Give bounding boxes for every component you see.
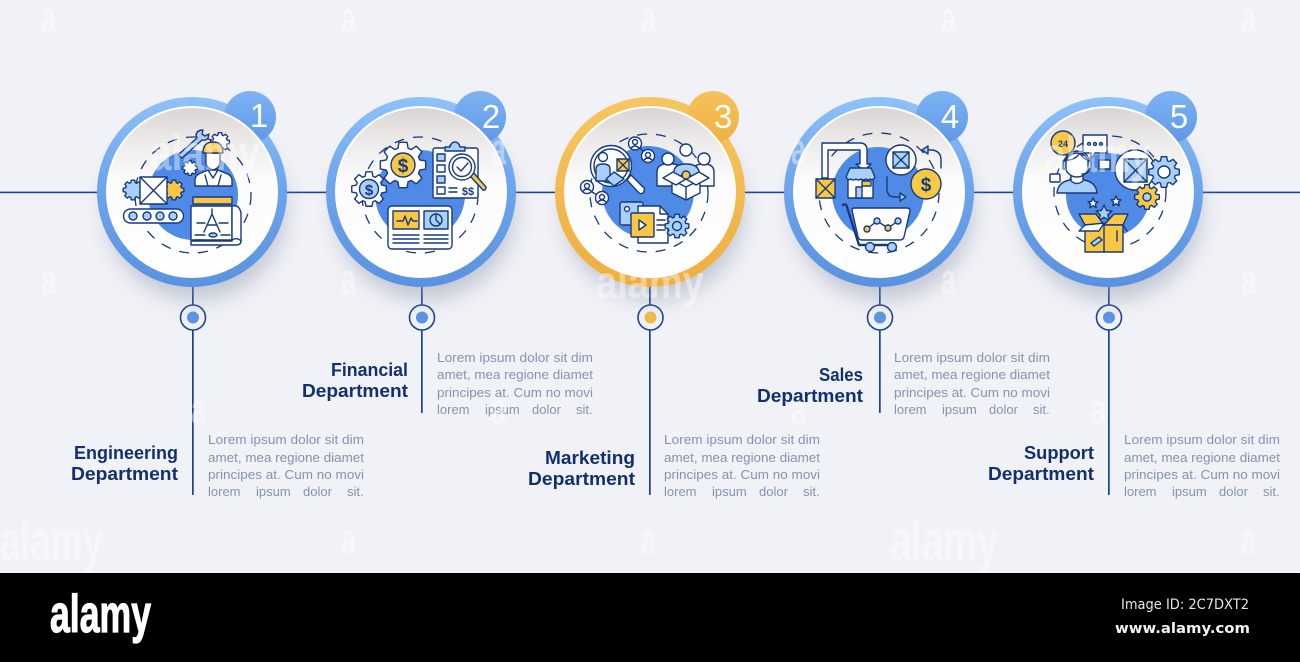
heading: Sales Department (757, 364, 863, 406)
body text 4: sit. (1033, 402, 1050, 417)
heading: Financial Department: Financial (331, 359, 408, 380)
heading: Sales Department: Department (757, 385, 863, 406)
icon: support (1050, 131, 1179, 252)
body text 4 (894, 350, 1050, 417)
icon: engineering (123, 130, 241, 245)
timeline: horizontal connector (0, 192, 1300, 193)
watermarks: a (1241, 515, 1256, 564)
shadow (335, 120, 515, 300)
heading: Sales Department: Sales (819, 364, 863, 385)
heading: Support Department: Support (1024, 442, 1094, 463)
face 4 (794, 107, 964, 277)
blue disc 3 (602, 146, 694, 238)
watermarks: alamy (890, 509, 998, 573)
body text 2: sit. (576, 402, 593, 417)
icon: finance (352, 142, 486, 249)
body text 1: dolor (303, 484, 333, 499)
body text 1: sit. (347, 484, 364, 499)
body text 5: lorem (1124, 484, 1157, 499)
icon: support: 24 (1058, 139, 1068, 149)
body text 2: Lorem ipsum dolor sit dim (437, 350, 593, 365)
shadow (564, 120, 744, 300)
body text 2: amet, mea regione diamet (437, 367, 593, 382)
face 5 (1023, 107, 1193, 277)
body text 3: dolor (759, 484, 789, 499)
body text 5: dolor (1219, 484, 1249, 499)
step 2: financial department (302, 91, 593, 417)
heading: Financial Department: Department (302, 380, 408, 401)
number 4: 4 (941, 98, 959, 135)
body text 4: amet, mea regione diamet (894, 367, 1050, 382)
number badge 2 (454, 91, 506, 143)
footer logo: alamy (50, 585, 151, 644)
watermarks: a (191, 385, 206, 434)
watermarks: a (341, 515, 356, 564)
icon: sales: $ (921, 175, 932, 196)
connector stem with node 1 (180, 285, 206, 495)
watermarks: a (1091, 385, 1106, 434)
body text 3: sit. (803, 484, 820, 499)
number 3: 3 (714, 98, 732, 135)
step 1: engineering department (71, 91, 364, 499)
ring 2 (326, 97, 516, 287)
body text 1: amet, mea regione diamet (208, 450, 364, 465)
icon: finance: $ (365, 182, 374, 199)
dashed ring 4 (819, 133, 939, 253)
body text 3: Lorem ipsum dolor sit dim (664, 432, 820, 447)
number badge 3 (687, 91, 739, 143)
step 4: sales department (757, 91, 1050, 417)
number 2: 2 (482, 98, 500, 135)
body text 2: dolor (532, 402, 562, 417)
body text 5 (1124, 432, 1280, 499)
ring 4 (784, 97, 974, 287)
blue disc 1 (148, 150, 238, 240)
ring 1 (97, 97, 287, 287)
watermarks: alamy (1045, 127, 1151, 183)
watermarks: a (491, 385, 506, 434)
watermarks: a (491, 125, 506, 174)
watermarks: a (791, 385, 806, 434)
heading: Engineering Department: Engineering (74, 442, 178, 463)
watermarks: a (641, 515, 656, 564)
body text 1: ipsum (256, 484, 291, 499)
body text 5: principes at. Cum no movi (1124, 467, 1280, 482)
blue disc 2 (375, 150, 465, 240)
heading: Engineering Department: Department (71, 463, 178, 484)
image id: Image ID: 2C7DXT2 (1121, 597, 1249, 613)
body text 4: dolor (989, 402, 1019, 417)
icon: finance: $ (398, 156, 409, 177)
body text 2: lorem (437, 402, 470, 417)
body text 1: lorem (208, 484, 241, 499)
body text 5: amet, mea regione diamet (1124, 450, 1280, 465)
watermarks: alamy (596, 256, 704, 308)
icon: sales (816, 143, 941, 252)
step 3: marketing department (528, 91, 820, 499)
heading: Financial Department (302, 359, 408, 401)
website: www.alamy.com (1115, 621, 1250, 637)
shadow (106, 120, 286, 300)
body text 3: lorem (664, 484, 697, 499)
dashed ring 2 (362, 137, 478, 253)
body text 4: lorem (894, 402, 927, 417)
blue disc 4 (832, 147, 924, 239)
body text 3 (664, 432, 820, 499)
body text 5: ipsum (1172, 484, 1207, 499)
ring 3 (555, 97, 745, 287)
icon: finance: $$ (462, 186, 474, 198)
body text 3: ipsum (712, 484, 747, 499)
watermarks: a (41, 255, 56, 304)
heading: Support Department: Department (988, 463, 1094, 484)
body text 2: principes at. Cum no movi (437, 385, 593, 400)
heading: Support Department (988, 442, 1094, 484)
connector stem with node 3 (638, 285, 663, 495)
body text 5: Lorem ipsum dolor sit dim (1124, 432, 1280, 447)
ring 5 (1013, 97, 1203, 287)
body text 4: principes at. Cum no movi (894, 385, 1050, 400)
number 5: 5 (1170, 98, 1188, 135)
body text 4: Lorem ipsum dolor sit dim (894, 350, 1050, 365)
face 2 (336, 107, 506, 277)
connector stem with node 2 (410, 285, 434, 413)
shadow (793, 120, 973, 300)
shadow (1022, 120, 1202, 300)
heading: Marketing Department (528, 447, 635, 489)
face 3 (565, 107, 735, 277)
dashed ring 3 (590, 134, 708, 252)
connector stem with node 5 (1096, 285, 1122, 495)
body text 1: Lorem ipsum dolor sit dim (208, 432, 364, 447)
number 1: 1 (250, 97, 268, 134)
body text 5: sit. (1263, 484, 1280, 499)
heading: Marketing Department: Marketing (545, 447, 635, 468)
watermarks: alamy (0, 509, 103, 573)
watermarks: a (1241, 255, 1256, 304)
face 1 (107, 107, 277, 277)
body text 4: ipsum (942, 402, 977, 417)
dashed ring 1 (135, 137, 251, 253)
body text 3: principes at. Cum no movi (664, 467, 820, 482)
body text 1: principes at. Cum no movi (208, 467, 364, 482)
dashed ring 5 (1054, 136, 1166, 248)
number badge 5 (1145, 91, 1197, 143)
watermarks: a (791, 125, 806, 174)
connector stem with node 4 (868, 285, 892, 413)
footer band (0, 573, 1300, 662)
heading: Engineering Department (71, 442, 178, 484)
icon: marketing (580, 137, 714, 243)
watermarks: a (341, 255, 356, 304)
heading: Marketing Department: Department (528, 468, 635, 489)
watermarks: alamy (150, 125, 260, 181)
watermarks: a (941, 255, 956, 304)
body text 2 (437, 350, 593, 417)
number badge 4 (916, 91, 968, 143)
body text 3: amet, mea regione diamet (664, 450, 820, 465)
number badge 1 (224, 91, 276, 143)
step 5: support department (988, 91, 1280, 499)
body text 2: ipsum (485, 402, 520, 417)
body text 1 (208, 432, 364, 499)
blue disc 5 (1066, 153, 1150, 237)
